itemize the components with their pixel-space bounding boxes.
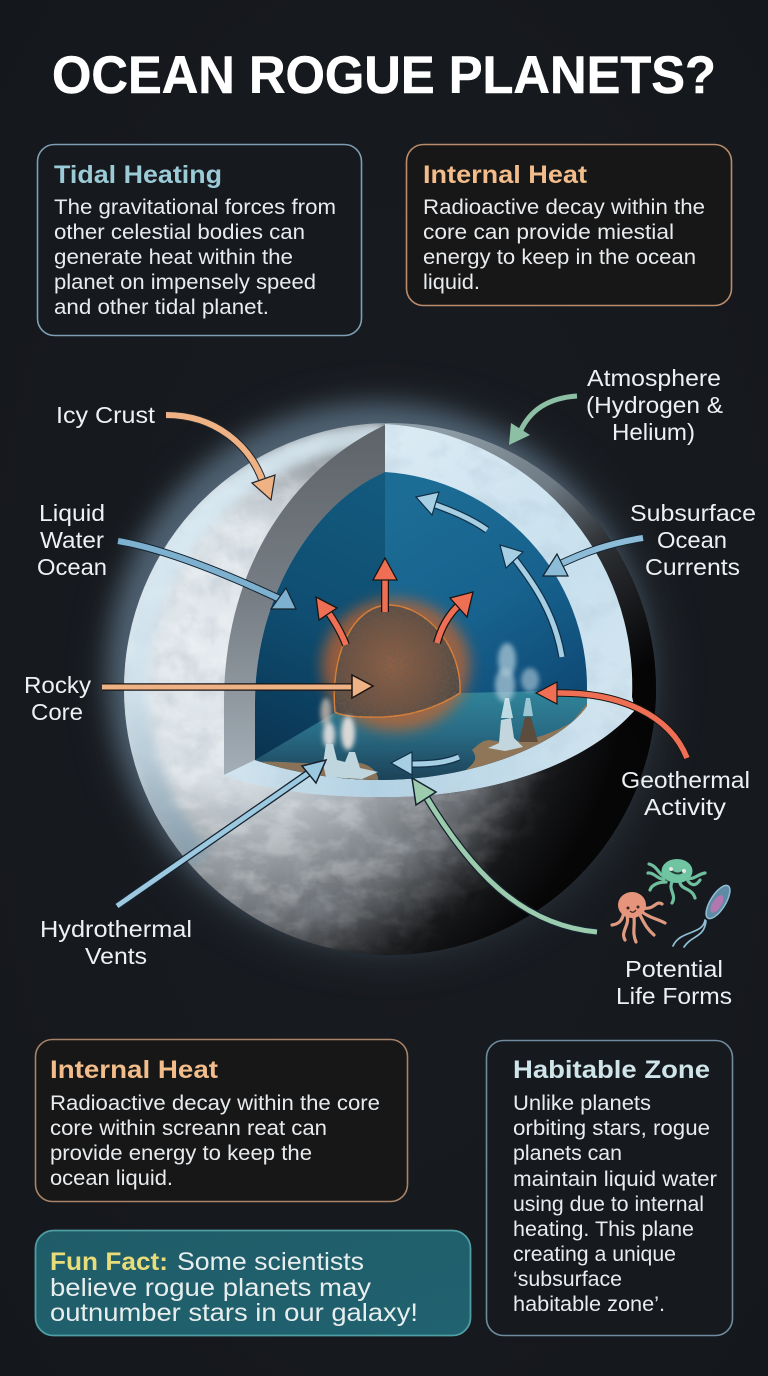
arrow: heat up left [316, 597, 346, 645]
text block: tidal heating: planet on impensely speed [54, 270, 316, 294]
text block: tidal heating: and other tidal planet. [54, 295, 269, 319]
text block: habitable zone: Unlike planets [513, 1091, 651, 1115]
text block: habitable zone: maintain liquid water [513, 1167, 717, 1191]
label: geothermal activity: Activity [644, 794, 727, 820]
title: OCEAN ROGUE PLANETS? [52, 46, 716, 105]
text block: internal heat: provide energy to keep the [50, 1141, 312, 1165]
heading: tidal heating: Tidal Heating [54, 161, 222, 189]
icon: orange jellyfish [612, 892, 665, 942]
panel: habitable zone [486, 1040, 732, 1336]
hydrothermal vents left [320, 698, 378, 779]
arrow: heat up centre [373, 558, 397, 612]
text block: habitable zone: planets can [513, 1141, 622, 1165]
planet sphere [124, 423, 656, 955]
panel: fun fact [36, 1230, 470, 1336]
text block: internal heat: liquid. [423, 270, 480, 294]
text block: habitable zone: heating. This plane [513, 1217, 694, 1241]
gray cut wall [224, 425, 385, 775]
text block: internal heat: core within screann reat can [50, 1116, 327, 1140]
label: liquid water ocean: Liquid [39, 500, 105, 526]
text block: internal heat: Radioactive decay within the core [50, 1091, 380, 1115]
label: potential life forms [616, 956, 732, 1009]
rock shelf left [260, 762, 378, 780]
label: geothermal activity: Geothermal [621, 767, 750, 793]
panel: tidal heating [38, 144, 362, 336]
text block: internal heat: ocean liquid. [50, 1166, 173, 1190]
arrow: current right [500, 545, 562, 657]
icon: flagellate microbe [673, 882, 734, 947]
arrow: potential life forms [412, 778, 597, 932]
text block: tidal heating [54, 195, 336, 319]
ocean [255, 472, 587, 780]
rocky core [334, 604, 461, 718]
planet cutaway diagram [103, 398, 670, 962]
arrow: heat up right [437, 592, 473, 643]
heading: internal heat: Internal Heat [50, 1056, 219, 1084]
text block: habitable zone: creating a unique [513, 1242, 676, 1266]
label: geothermal activity [621, 767, 750, 820]
rock shelf right [465, 704, 587, 770]
text block: tidal heating: The gravitational forces from [54, 195, 336, 219]
text block: habitable zone: using due to internal [513, 1192, 704, 1216]
label: subsurface ocean currents [630, 500, 756, 580]
label: hydrothermal vents: Vents [85, 943, 147, 969]
arrow: atmosphere [509, 396, 577, 445]
label: atmosphere: Atmosphere [587, 365, 721, 391]
label: potential life forms: Life Forms [616, 983, 732, 1009]
label: potential life forms: Potential [625, 956, 723, 982]
text block: internal heat [423, 195, 705, 294]
arrow: icy crust [166, 415, 275, 500]
fun fact text [50, 1248, 418, 1327]
label: rocky core: Core [31, 699, 83, 725]
heading: internal heat: Internal Heat [423, 161, 588, 189]
fun fact text: outnumber stars in our galaxy! [50, 1299, 418, 1327]
fun fact text: Fun Fact: [50, 1248, 168, 1276]
label: rocky core: Rocky [24, 672, 92, 698]
arrow: current bottom [391, 752, 459, 775]
text block: habitable zone: orbiting stars, rogue [513, 1116, 710, 1140]
fun fact text: believe rogue planets may [50, 1274, 372, 1302]
label: subsurface ocean currents: Currents [645, 554, 740, 580]
label: atmosphere [586, 365, 723, 445]
label: subsurface ocean currents: Ocean [657, 527, 727, 553]
label: atmosphere: (Hydrogen & [586, 392, 723, 418]
label: hydrothermal vents [40, 916, 192, 969]
text block: internal heat: core can provide miestial [423, 220, 674, 244]
text block: habitable zone [513, 1091, 717, 1316]
hydrothermal vents right [488, 643, 539, 751]
text block: habitable zone: habitable zone’. [513, 1292, 665, 1316]
label: liquid water ocean [37, 500, 107, 580]
text block: tidal heating: other celestial bodies can [54, 220, 305, 244]
text block: internal heat: Radioactive decay within the [423, 195, 705, 219]
icon: green jellyfish [648, 859, 705, 903]
ocean floor [255, 690, 587, 780]
arrow: liquid water ocean [118, 541, 296, 609]
arrow: subsurface ocean currents [543, 538, 643, 576]
arrow: rocky core [102, 675, 373, 698]
text block: tidal heating: generate heat within the [54, 245, 293, 269]
text block: internal heat: energy to keep in the ocean [423, 245, 696, 269]
label: liquid water ocean: Ocean [37, 554, 107, 580]
arrow: current top [416, 492, 487, 530]
arrow: geothermal activity [536, 682, 687, 758]
label: icy crust: Icy Crust [56, 402, 156, 428]
text block: habitable zone: ‘subsurface [513, 1267, 622, 1291]
label: hydrothermal vents: Hydrothermal [40, 916, 192, 942]
label: atmosphere: Helium) [612, 419, 695, 445]
label: liquid water ocean: Water [40, 527, 104, 553]
fun fact text: Some scientists [177, 1248, 364, 1276]
heading: habitable zone: Habitable Zone [513, 1056, 710, 1084]
label: subsurface ocean currents: Subsurface [630, 500, 756, 526]
ice shell [224, 424, 635, 797]
arrow: hydrothermal vents [117, 760, 326, 906]
text block: internal heat [50, 1091, 380, 1190]
panel: internal heat top [406, 144, 732, 306]
panel: internal heat bottom [36, 1040, 408, 1202]
label: rocky core [24, 672, 92, 725]
